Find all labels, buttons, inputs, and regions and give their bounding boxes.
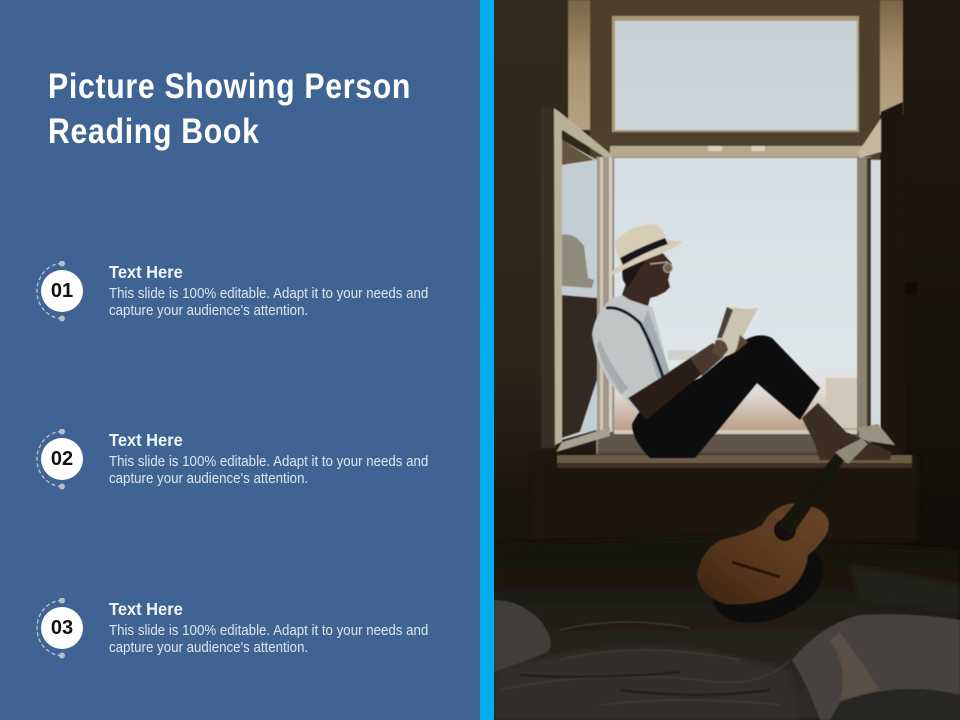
window sill and wall beneath — [533, 455, 918, 540]
pillow right — [792, 614, 960, 720]
text 02: This slide is 100% editable. Adapt it to your needs and — [109, 454, 428, 470]
text 03: capture your audience's attention. — [109, 640, 308, 656]
panel: blue background — [0, 0, 480, 720]
heading 01: Text Here — [109, 262, 183, 282]
forearm — [628, 343, 723, 420]
accent bar — [480, 0, 494, 720]
text 01 — [109, 286, 428, 319]
title — [48, 67, 411, 151]
badge 01: 01 — [51, 280, 73, 302]
item 03 — [36, 598, 428, 658]
photo: person reading at window — [494, 0, 960, 720]
book — [717, 307, 758, 356]
suspender — [606, 308, 663, 377]
room walls — [494, 0, 960, 720]
badge 02: 02 — [51, 448, 73, 470]
person reading — [592, 224, 892, 460]
item 02 — [36, 429, 428, 490]
guitar — [697, 438, 868, 638]
text 03 — [109, 623, 428, 656]
glasses — [650, 262, 668, 264]
heading 03: Text Here — [109, 598, 183, 618]
badge 02 — [36, 429, 83, 490]
hand — [712, 340, 728, 358]
window frame and panes — [568, 0, 903, 455]
text 03: This slide is 100% editable. Adapt it to your needs and — [109, 623, 428, 639]
text 01: This slide is 100% editable. Adapt it to your needs and — [109, 286, 428, 302]
neck and head — [622, 250, 672, 306]
text 02: capture your audience's attention. — [109, 471, 308, 487]
pants — [632, 335, 820, 458]
shin and foot — [802, 403, 892, 460]
left open casement — [541, 106, 614, 452]
item 01 — [36, 261, 428, 322]
text 02 — [109, 454, 428, 487]
pillow left — [494, 600, 551, 672]
text 01: capture your audience's attention. — [109, 303, 308, 319]
title: Reading Book — [48, 112, 260, 151]
badge 03: 03 — [51, 617, 73, 639]
horizon haze — [668, 350, 696, 360]
title: Picture Showing Person — [48, 67, 411, 106]
badge 01 — [36, 261, 83, 322]
hat — [608, 224, 683, 278]
bed sheets — [494, 538, 960, 720]
right open casement — [858, 102, 917, 452]
badge 03 — [36, 598, 83, 658]
shirt — [592, 294, 674, 418]
heading 02: Text Here — [109, 430, 183, 450]
